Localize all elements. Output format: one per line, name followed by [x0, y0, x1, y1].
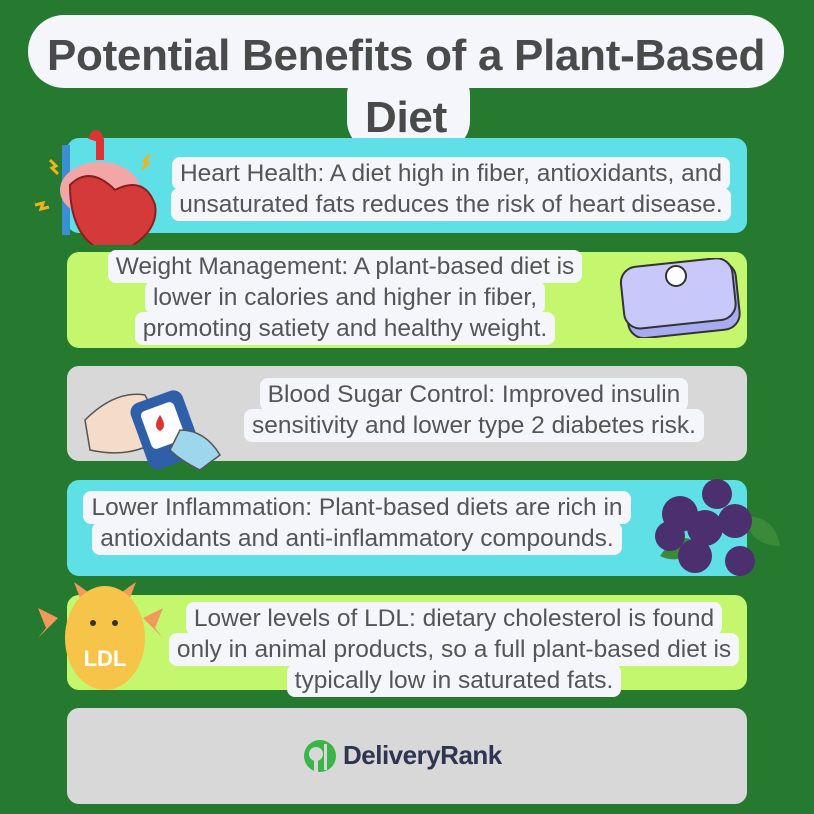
- logo: DeliveryRank: DeliveryRank: [343, 740, 502, 770]
- panel: inflammation: [67, 480, 747, 576]
- panel: blood sugar: [67, 366, 747, 461]
- text: weight management: [108, 250, 582, 345]
- panel: LDL: [67, 595, 747, 690]
- text: inflammation: antioxidants and anti-inflammatory compounds.: [100, 525, 614, 552]
- text: heart health: Heart Health: A diet high in fiber, antioxidants, and: [180, 160, 722, 187]
- icon: berries: [655, 479, 780, 576]
- title: [28, 15, 784, 142]
- text: blood sugar: Blood Sugar Control: Improved insulin: [268, 381, 680, 408]
- title: Diet: [365, 93, 447, 142]
- text: blood sugar: sensitivity and lower type 2 diabetes risk.: [252, 412, 696, 439]
- panel: weight management: [67, 252, 747, 348]
- text: inflammation: [83, 491, 631, 555]
- text: heart health: unsaturated fats reduces the risk of heart disease.: [179, 191, 723, 218]
- text: weight management: lower in calories and higher in fiber,: [153, 284, 537, 311]
- panel: heart health: [67, 138, 747, 233]
- icon: glucose meter: [84, 390, 221, 470]
- icon: heart: [34, 130, 156, 245]
- icon: LDL devil: LDL: [84, 646, 126, 671]
- text: heart health: [171, 157, 731, 221]
- icon: LDL devil: [38, 582, 163, 690]
- text: LDL: typically low in saturated fats.: [295, 667, 613, 694]
- text: inflammation: Lower Inflammation: Plant-based diets are rich in: [91, 494, 623, 521]
- text: LDL: only in animal products, so a full plant-based diet is: [177, 636, 731, 663]
- panel: footer: [67, 708, 747, 804]
- text: LDL: Lower levels of LDL: dietary cholesterol is found: [194, 605, 714, 632]
- text: LDL: [169, 602, 739, 697]
- icon: scale: [620, 258, 741, 338]
- text: blood sugar: [244, 378, 704, 442]
- title: Potential Benefits of a Plant-Based: [47, 31, 765, 80]
- text: weight management: promoting satiety and healthy weight.: [143, 315, 547, 342]
- text: weight management: Weight Management: A plant-based diet is: [116, 253, 574, 280]
